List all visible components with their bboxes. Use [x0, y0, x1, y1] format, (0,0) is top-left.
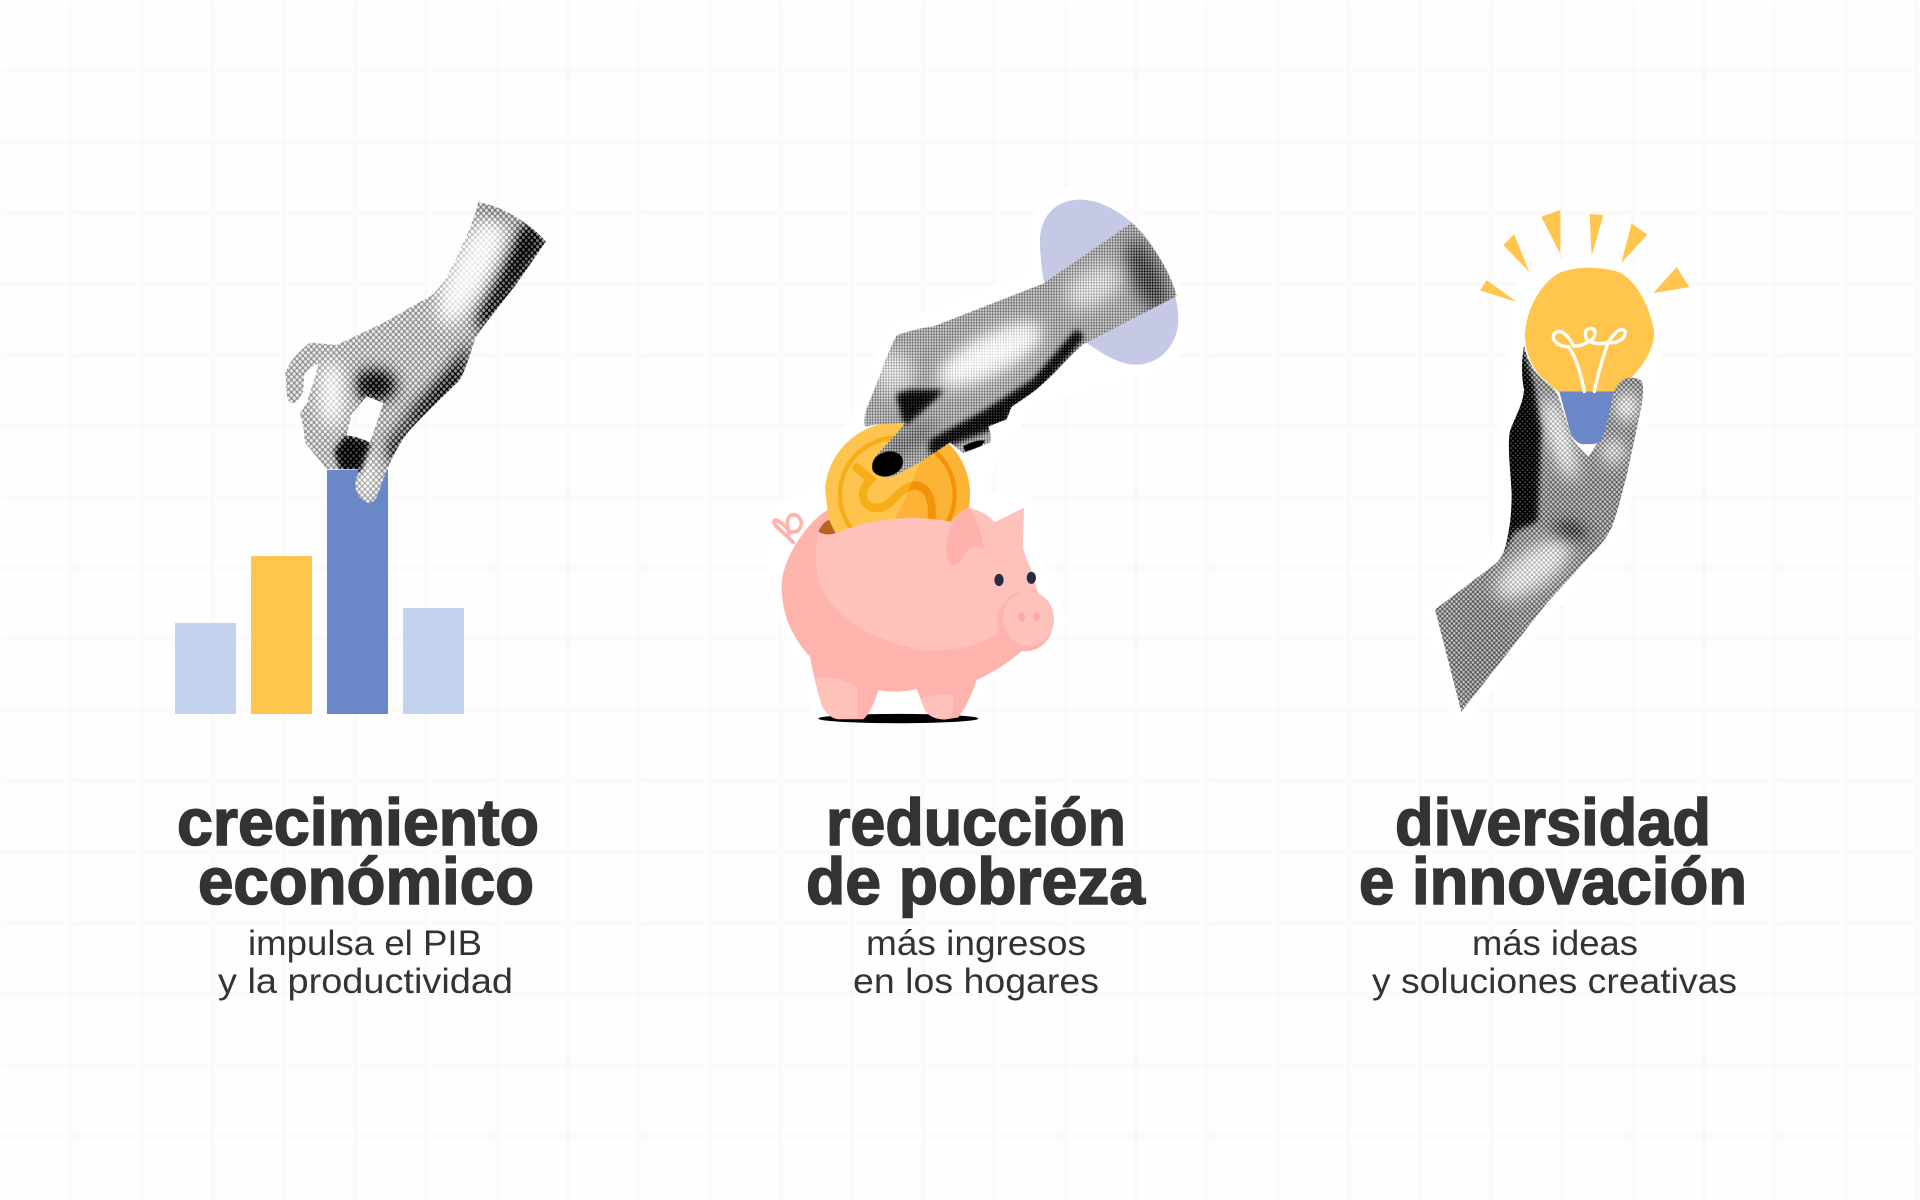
text block: más ideas	[1472, 924, 1638, 963]
panel: reducción de pobreza	[773, 200, 1183, 1001]
text block: y la productividad	[218, 962, 513, 1001]
heading	[806, 785, 1146, 918]
icon: halftone hand	[277, 194, 553, 509]
text block	[218, 924, 513, 1001]
icon: light bulb	[1525, 268, 1654, 444]
icon: light rays	[1480, 210, 1689, 302]
text block	[853, 924, 1099, 1001]
heading: reducción	[826, 785, 1126, 859]
icon: halftone hand	[860, 216, 1183, 484]
text block: en los hogares	[853, 962, 1099, 1001]
icon: gold coin	[825, 422, 970, 534]
illustration: hand and piggy bank	[773, 200, 1183, 723]
text block	[1372, 924, 1737, 1001]
heading: de pobreza	[806, 844, 1146, 918]
heading: diversidad	[1395, 785, 1711, 859]
bar chart	[175, 470, 464, 714]
heading: crecimiento	[177, 785, 539, 859]
icon: halftone hand	[1430, 338, 1650, 717]
text block: impulsa el PIB	[248, 924, 482, 963]
icon: piggy bank	[774, 422, 1054, 723]
heading	[177, 785, 539, 918]
shape: lavender blob	[1040, 200, 1178, 365]
illustration: hand holding light bulb	[1430, 210, 1689, 717]
text block: más ingresos	[866, 924, 1086, 963]
panel: crecimiento económico	[175, 194, 553, 1001]
heading: económico	[198, 844, 534, 918]
text block: y soluciones creativas	[1372, 962, 1737, 1001]
heading	[1359, 785, 1747, 918]
panel: diversidad e innovación	[1359, 210, 1747, 1001]
heading: e innovación	[1359, 844, 1747, 918]
